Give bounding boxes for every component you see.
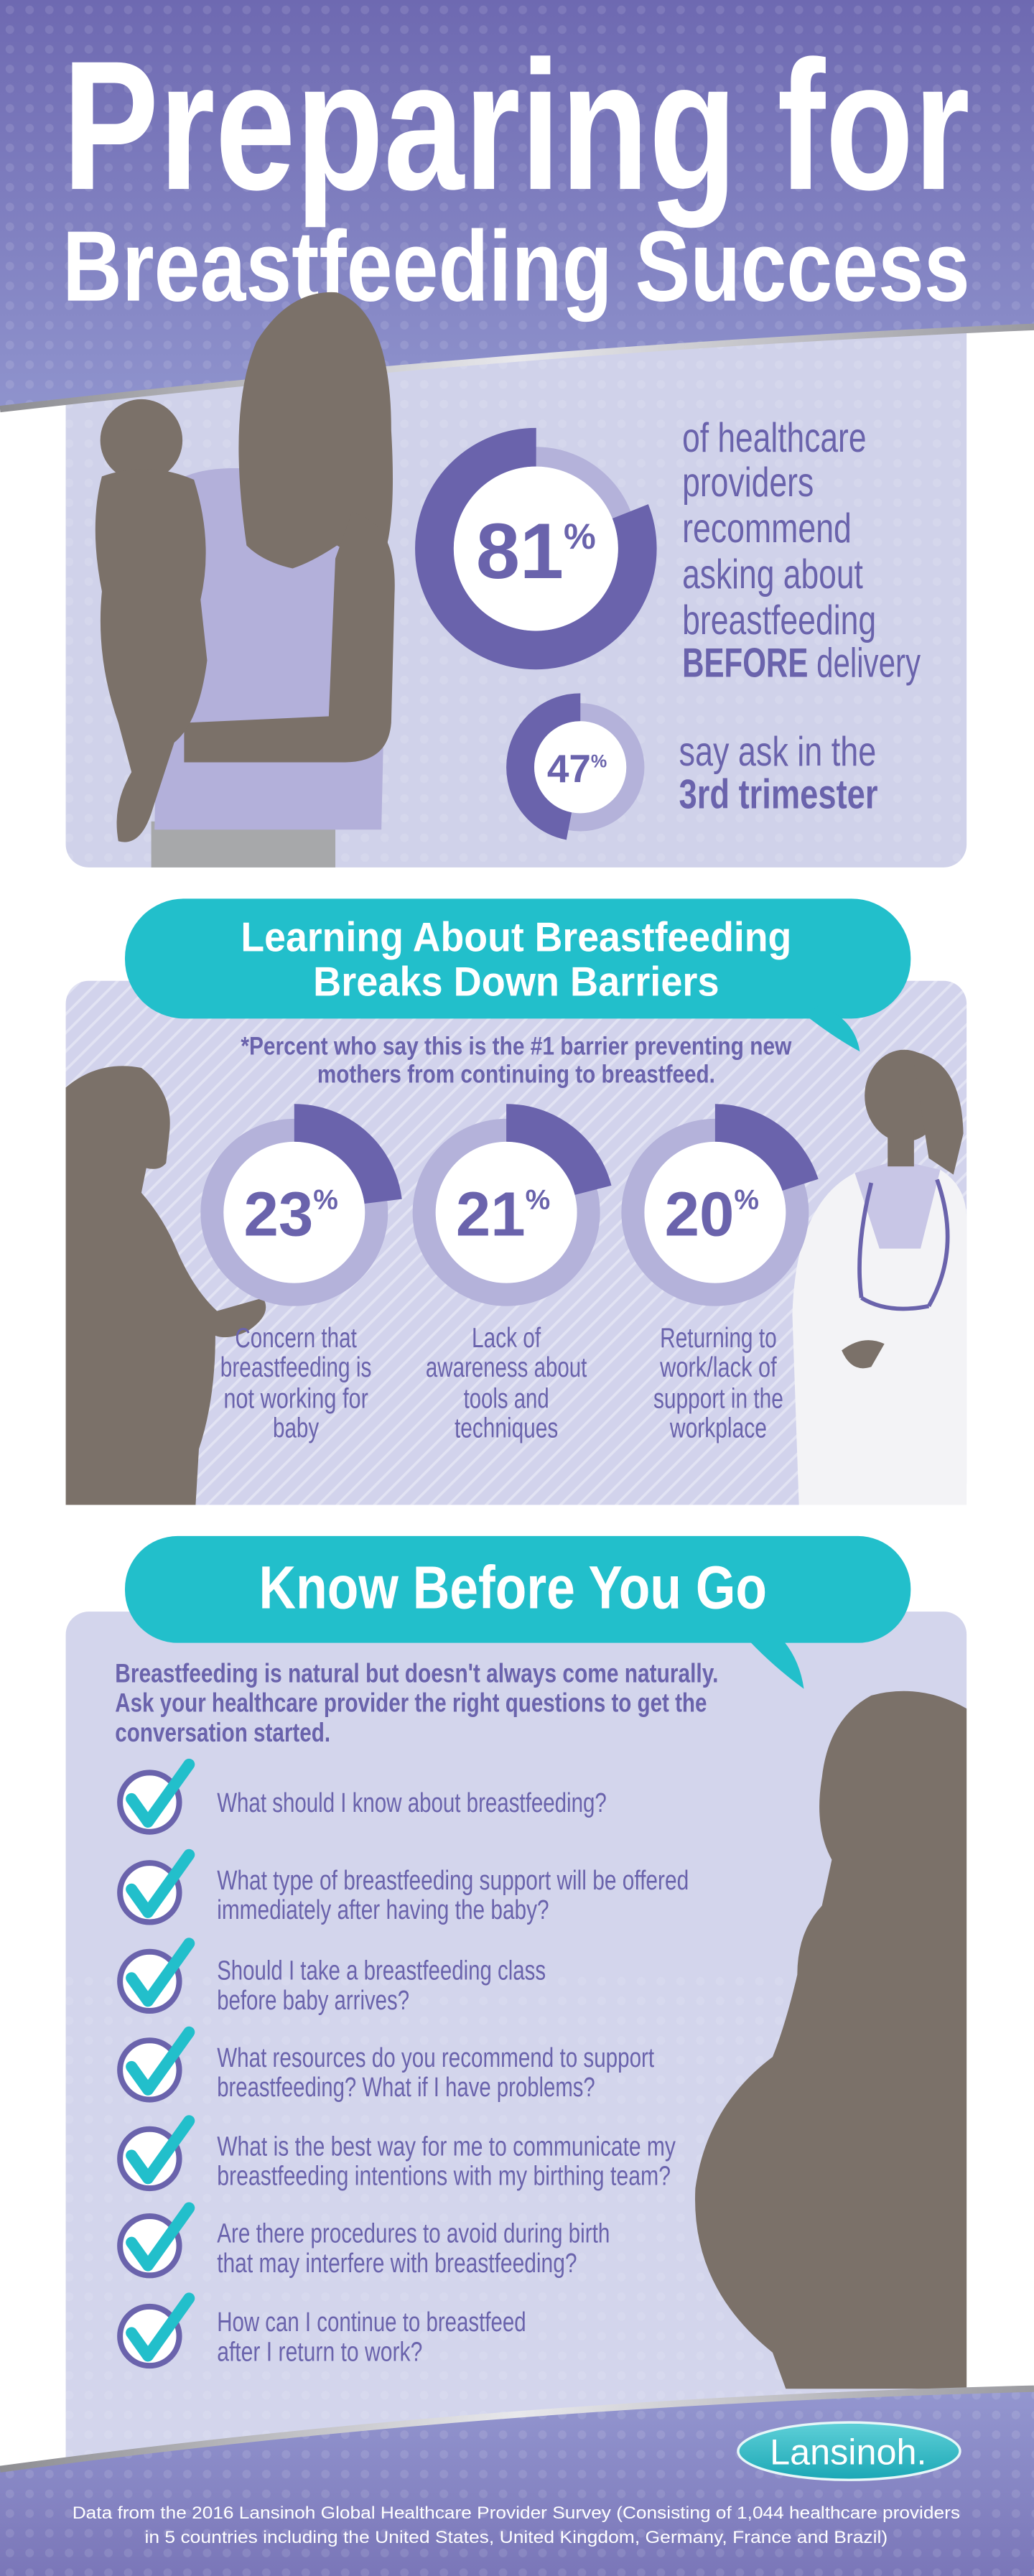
chart: 23% donut: % bbox=[313, 1185, 338, 1216]
text: intro: conversation started. bbox=[115, 1718, 330, 1747]
chart: 47% donut bbox=[510, 697, 651, 837]
logo: Lansinoh bbox=[738, 2422, 960, 2480]
item 3 bbox=[120, 1943, 546, 2016]
labels: barrier descriptions: not working for bbox=[223, 1384, 368, 1414]
subtitle: barrier note: mothers from continuing to breastfeed. bbox=[317, 1060, 715, 1089]
item 4 bbox=[120, 2032, 655, 2103]
item 2 bbox=[120, 1855, 689, 1925]
chart: 47% donut: 47 bbox=[547, 746, 591, 791]
logo: Lansinoh: Lansinoh. bbox=[770, 2431, 926, 2472]
title bbox=[62, 23, 970, 322]
chart: 21% donut bbox=[416, 1123, 596, 1302]
labels: barrier descriptions: baby bbox=[273, 1413, 320, 1444]
subtitle: barrier note bbox=[241, 1032, 792, 1089]
chart: 81% donut: % bbox=[564, 516, 596, 557]
text: 81% description bbox=[682, 415, 921, 686]
item 4: breastfeeding? What if I have problems? bbox=[217, 2073, 595, 2103]
item 1 bbox=[120, 1764, 607, 1832]
panel: barriers bbox=[66, 981, 967, 1505]
illustration: mother holding baby bbox=[96, 292, 395, 868]
item 4: What resources do you recommend to support bbox=[217, 2043, 655, 2073]
text: intro: Ask your healthcare provider the right questions to get the bbox=[115, 1688, 707, 1718]
speech bubble: know before you go bbox=[125, 1536, 910, 1689]
footer band bbox=[0, 2389, 1034, 2576]
item 7 bbox=[120, 2298, 526, 2367]
speech bubble: learning about breastfeeding: Breaks Down Barriers bbox=[313, 959, 719, 1005]
illustration: doctor bbox=[792, 1050, 967, 1505]
item 5: What is the best way for me to communicate my bbox=[217, 2131, 676, 2162]
chart: 20% donut: 20 bbox=[665, 1179, 734, 1249]
text: 81% description: breastfeeding bbox=[682, 597, 876, 643]
labels: barrier descriptions: work/lack of bbox=[659, 1352, 777, 1383]
text: 47% description bbox=[679, 729, 878, 818]
item 3: before baby arrives? bbox=[217, 1986, 409, 2016]
labels: barrier descriptions bbox=[220, 1323, 783, 1444]
text: intro: Breastfeeding is natural but doesn't always come naturally. bbox=[115, 1659, 718, 1688]
checklist: questions bbox=[120, 1764, 689, 2367]
item 6: that may interfere with breastfeeding? bbox=[217, 2249, 577, 2279]
chart: 81% donut: 81 bbox=[476, 508, 564, 595]
item 2: immediately after having the baby? bbox=[217, 1895, 549, 1925]
labels: barrier descriptions: breastfeeding is bbox=[220, 1352, 371, 1383]
chart: 20% donut: % bbox=[734, 1185, 759, 1216]
labels: barrier descriptions: workplace bbox=[669, 1413, 767, 1444]
text: 81% description: recommend bbox=[682, 506, 852, 552]
text: 81% description: asking about bbox=[682, 552, 863, 597]
labels: barrier descriptions: Returning to bbox=[660, 1323, 777, 1354]
item 5: breastfeeding intentions with my birthing team? bbox=[217, 2162, 671, 2192]
illustration: pregnant woman profile bbox=[695, 1691, 967, 2389]
text: intro bbox=[115, 1659, 718, 1747]
illustration: pregnant woman talking bbox=[66, 1066, 266, 1505]
labels: barrier descriptions: techniques bbox=[455, 1413, 558, 1444]
speech bubble: learning about breastfeeding: Learning About Breastfeeding bbox=[241, 915, 791, 961]
chart: 21% donut: 21 bbox=[456, 1179, 526, 1249]
text: 81% description: providers bbox=[682, 460, 814, 506]
chart: 81% donut bbox=[404, 417, 668, 680]
speech bubble: learning about breastfeeding bbox=[125, 898, 910, 1051]
item 6 bbox=[120, 2208, 610, 2279]
chart: 23% donut bbox=[205, 1123, 384, 1302]
text: 47% description: 3rd trimester bbox=[679, 772, 878, 818]
footer: source note: Data from the 2016 Lansinoh Global Healthcare Provider Survey (Consisting of 1,044 healthcare providers bbox=[73, 2503, 960, 2523]
chart: 47% donut: % bbox=[591, 751, 607, 771]
item 3: Should I take a breastfeeding class bbox=[217, 1956, 546, 1986]
labels: barrier descriptions: Concern that bbox=[235, 1323, 357, 1354]
labels: barrier descriptions: Lack of bbox=[472, 1323, 541, 1354]
header band bbox=[0, 0, 1034, 409]
item 2: What type of breastfeeding support will be offered bbox=[217, 1866, 689, 1896]
panel: know before you go bbox=[66, 1612, 967, 2498]
footer: source note: in 5 countries including the United States, United Kingdom, Germany, France and Brazil) bbox=[144, 2528, 888, 2547]
item 5 bbox=[120, 2121, 676, 2192]
text: 47% description: say ask in the bbox=[679, 729, 876, 775]
item 7: after I return to work? bbox=[217, 2337, 422, 2367]
panel: healthcare providers stats bbox=[66, 296, 967, 868]
speech bubble: know before you go: Know Before You Go bbox=[259, 1553, 767, 1622]
chart: 20% donut bbox=[625, 1123, 805, 1302]
text: 81% description: of healthcare bbox=[682, 415, 866, 461]
footer: source note bbox=[73, 2503, 960, 2547]
labels: barrier descriptions: support in the bbox=[653, 1384, 783, 1414]
text: 81% description: BEFORE delivery bbox=[682, 641, 921, 686]
chart: 23% donut: 23 bbox=[244, 1179, 313, 1249]
chart: 21% donut: % bbox=[526, 1185, 550, 1216]
labels: barrier descriptions: awareness about bbox=[426, 1352, 587, 1383]
labels: barrier descriptions: tools and bbox=[464, 1384, 549, 1414]
item 1: What should I know about breastfeeding? bbox=[217, 1788, 607, 1818]
subtitle: barrier note: *Percent who say this is the #1 barrier preventing new bbox=[241, 1032, 792, 1061]
item 7: How can I continue to breastfeed bbox=[217, 2307, 526, 2338]
item 6: Are there procedures to avoid during birth bbox=[217, 2219, 610, 2249]
